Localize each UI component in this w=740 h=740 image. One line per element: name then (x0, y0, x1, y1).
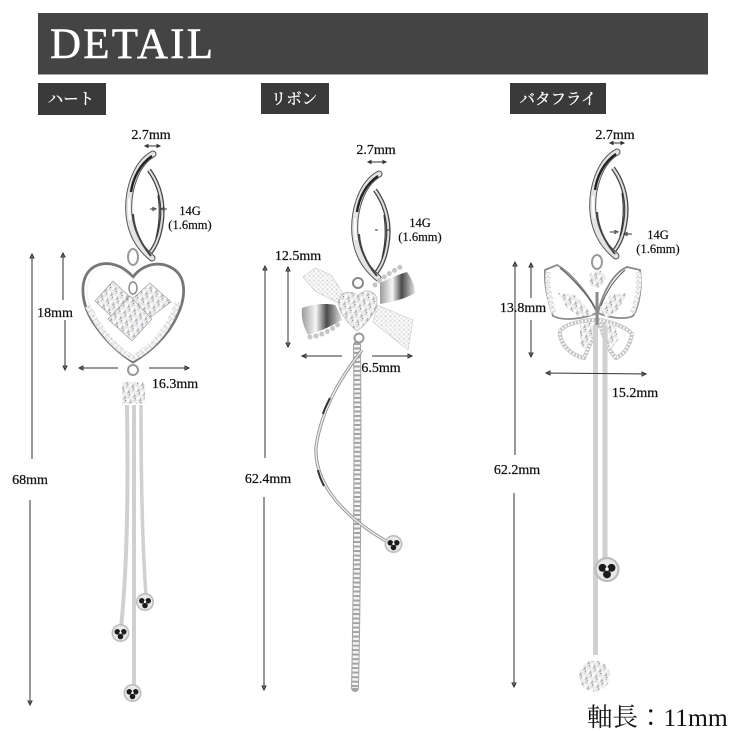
ribbon dimensions (245, 143, 442, 690)
heart center link (129, 282, 137, 294)
butterfly lower wings (560, 320, 597, 358)
heart frame (83, 264, 184, 362)
butterfly dimensions: 2.7mm (595, 128, 635, 143)
tag: butterfly: バタフライ (519, 90, 597, 108)
heart tassel gem (122, 382, 145, 404)
ribbon dimensions: 2.7mm (356, 143, 396, 158)
ribbon dimensions: 6.5mm (361, 361, 401, 376)
ribbon dimensions: 12.5mm (275, 249, 321, 264)
ribbon ball (384, 535, 402, 553)
heart lower link (128, 365, 138, 375)
heart dimensions: 68mm (12, 473, 48, 488)
tag: ribbon (261, 83, 329, 114)
ribbon dimensions: 62.4mm (245, 472, 291, 487)
butterfly dimensions: (1.6mm) (636, 242, 680, 256)
title bar (38, 13, 708, 74)
bow pave wings (303, 268, 413, 350)
heart balls (112, 593, 154, 702)
title text: DETAIL (50, 21, 213, 68)
butterfly dimensions: 62.2mm (494, 463, 540, 478)
tag: ribbon: リボン (271, 90, 317, 108)
butterfly ball (594, 557, 620, 582)
heart dimensions: 2.7mm (131, 128, 171, 143)
tag: heart (38, 83, 106, 115)
tag: butterfly (510, 83, 606, 114)
heart stones (95, 281, 129, 317)
butterfly chains (593, 325, 598, 655)
butterfly dimensions: 15.2mm (612, 386, 658, 401)
ribbon hoop (355, 174, 388, 278)
ribbon dimensions: (1.6mm) (398, 230, 442, 244)
ribbon earring (302, 174, 415, 688)
butterfly dimensions (494, 128, 680, 687)
ribbon chain (355, 345, 357, 688)
butterfly marquise stones (558, 293, 627, 350)
heart dimensions: (1.6mm) (168, 218, 212, 232)
bow links (353, 278, 363, 288)
heart dimensions: 14G (179, 204, 201, 218)
heart hoop (129, 154, 162, 258)
axis length note: 軸長：11mm (587, 703, 728, 732)
tag: heart: ハート (48, 91, 94, 108)
heart pave band (88, 302, 178, 358)
heart dimensions (12, 128, 212, 705)
heart dimensions: 16.3mm (152, 377, 198, 392)
butterfly earring (545, 152, 641, 692)
bow heart stone (338, 291, 377, 331)
heart dimensions: 18mm (37, 306, 73, 321)
ribbon swoosh (316, 350, 386, 541)
butterfly hoop (593, 152, 626, 256)
butterfly dimensions: 14G (647, 228, 669, 242)
butterfly upper wings (545, 265, 597, 319)
butterfly body (596, 292, 598, 328)
butterfly wing pave (548, 272, 639, 313)
heart chains (121, 405, 127, 628)
heart link ring (128, 249, 138, 265)
heart earring (83, 154, 184, 702)
butterfly round gem (579, 660, 610, 692)
butterfly top link and gem (592, 255, 602, 269)
bow metal loops (302, 272, 415, 335)
butterfly dimensions: 13.8mm (500, 301, 546, 316)
bow pearls (375, 265, 404, 285)
ribbon dimensions: 14G (409, 216, 431, 230)
